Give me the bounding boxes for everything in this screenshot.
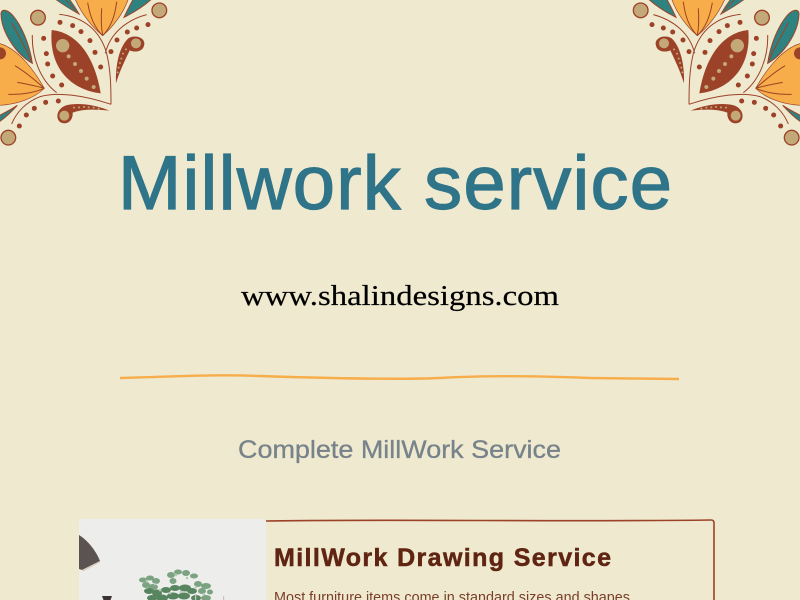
title: Millwork service (118, 141, 672, 226)
ornament: top-right floral corner (633, 0, 800, 145)
photo: lamp and plant on white wall (79, 519, 266, 600)
plant leaves (139, 570, 224, 600)
card outline (266, 520, 714, 600)
website url: www.shalindesigns.com (241, 280, 559, 312)
ornament: top-left floral corner (0, 0, 167, 145)
orange hand-drawn divider (120, 375, 679, 379)
card heading: MillWork Drawing Service (274, 544, 611, 572)
panel: millwork drawing service card (79, 519, 714, 600)
vase (102, 596, 112, 600)
lamp (79, 535, 100, 572)
subheading: Complete MillWork Service (238, 436, 561, 464)
